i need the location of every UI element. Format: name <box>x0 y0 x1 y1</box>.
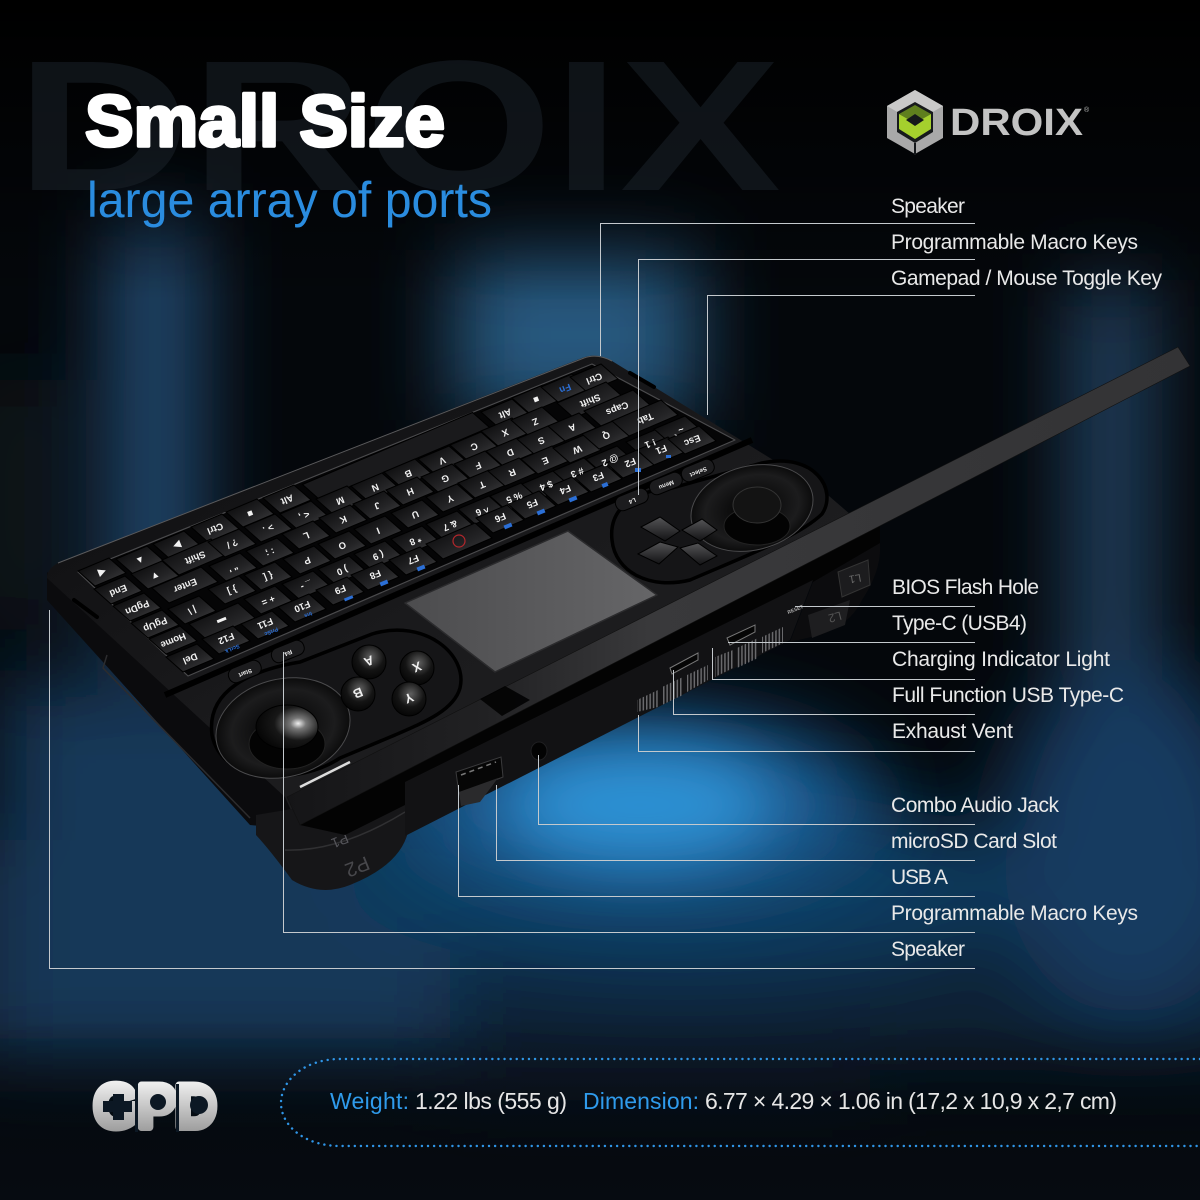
keyboard: # 3 <box>569 464 585 480</box>
keyboard: Fn <box>557 381 572 395</box>
left grip with P1 and P2 triggers: P1 <box>329 830 351 852</box>
specs pill dotted outline <box>281 1059 1200 1146</box>
lid edge <box>287 347 1190 825</box>
callout labels: microSD Card Slot <box>891 830 1057 853</box>
callout leader lines <box>50 224 975 968</box>
keyboard: P <box>301 554 312 567</box>
speaker slit, left <box>74 600 97 617</box>
callout labels <box>891 195 1162 961</box>
keyboard: < , <box>297 508 311 522</box>
right grip with L1 and L2 triggers <box>790 543 880 642</box>
left grip with P1 and P2 triggers <box>256 790 408 890</box>
keyboard: ? / <box>224 536 239 550</box>
keyboard: F12 <box>216 630 236 646</box>
keyboard: ▼ <box>149 568 161 582</box>
keyboard: ■ <box>245 507 255 519</box>
keyboard: } ] <box>226 583 238 597</box>
keyboard: | \ <box>186 603 198 617</box>
keyboard: Alt <box>496 406 513 421</box>
keyboard: F2 <box>623 455 637 469</box>
subtitle: large array of ports <box>87 172 492 228</box>
keyboard: F3 <box>591 469 605 483</box>
callout labels: Charging Indicator Light <box>892 648 1110 671</box>
keyboard: ) 0 <box>335 563 349 577</box>
keyboard: F10 <box>292 598 312 614</box>
callout labels: Speaker <box>891 195 965 218</box>
port panel with vents and connectors: RESET <box>787 604 804 616</box>
function buttons: L4 <box>627 496 636 504</box>
keyboard: O <box>337 539 347 551</box>
keyboard: M <box>334 493 346 507</box>
function buttons: R4 <box>283 648 293 656</box>
keyboard: E <box>540 454 550 466</box>
touchpad <box>405 531 657 672</box>
keyboard: I <box>375 524 381 536</box>
glossy highlight on lid edge <box>300 686 530 787</box>
DROIX logo: ® <box>1084 106 1090 114</box>
left grip with P1 and P2 triggers: P2 <box>342 851 372 881</box>
keyboard: X <box>499 426 510 439</box>
keyboard: ! 1 <box>642 436 657 450</box>
keyboard: G <box>440 472 450 484</box>
keyboard: F11 <box>255 615 274 631</box>
keyboard: & 7 <box>441 517 459 533</box>
keyboard: Enter <box>171 575 198 595</box>
hinge groove <box>165 440 752 695</box>
right grip with L1 and L2 triggers: L1 <box>848 571 862 585</box>
function buttons: Select <box>689 465 707 477</box>
keyboard: A <box>567 421 577 433</box>
keyboard: B <box>403 467 413 479</box>
callout labels: USB A <box>891 866 948 889</box>
callout labels: Speaker <box>891 938 965 961</box>
left gamepad controls: X <box>410 658 424 676</box>
keyboard: _ - <box>299 577 314 592</box>
callout labels: Programmable Macro Keys <box>891 231 1138 254</box>
keyboard: ▶ <box>170 538 183 552</box>
keyboard: > . <box>261 521 275 535</box>
port panel with vents and connectors <box>405 580 813 836</box>
keyboard: F7 <box>406 552 420 566</box>
device left side wall <box>47 572 300 830</box>
callout labels: Combo Audio Jack <box>891 794 1060 817</box>
keyboard: R <box>507 466 517 478</box>
callout labels: Full Function USB Type-C <box>892 684 1124 707</box>
DROIX logo: DROIX <box>950 102 1084 144</box>
keyboard: D <box>505 446 515 458</box>
specs text: 1.22 lbs (555 g) <box>415 1088 567 1114</box>
keyboard: F1 <box>653 442 668 456</box>
keyboard: Del <box>181 650 199 666</box>
keyboard: C <box>469 440 479 452</box>
keyboard: Y <box>444 492 455 505</box>
keyboard: K <box>338 513 348 525</box>
specs text: Dimension: <box>583 1088 699 1114</box>
keyboard: @ 2 <box>600 452 620 468</box>
keyboard: S <box>536 434 546 446</box>
function buttons: Menu <box>657 478 674 490</box>
keyboard: ▬ <box>215 614 228 628</box>
function buttons: Start <box>238 667 252 677</box>
keyboard: PrtSc <box>263 626 279 636</box>
front black band <box>300 525 880 835</box>
keyboard: ScrLk <box>223 642 240 654</box>
keyboard: F9 <box>333 582 347 596</box>
GPD logo: GPD <box>94 1073 216 1140</box>
keyboard: L <box>301 529 311 541</box>
keyboard: Shift <box>577 391 602 409</box>
keyboard: % 5 <box>504 489 524 505</box>
keyboard: Ins <box>303 610 313 618</box>
callout labels: Exhaust Vent <box>892 720 1013 743</box>
specs text <box>330 1088 1117 1114</box>
left gamepad controls <box>205 630 461 792</box>
keyboard: H <box>405 485 415 497</box>
keyboard: F <box>473 459 483 471</box>
keyboard: * 8 <box>408 533 422 547</box>
keyboard: Caps <box>604 399 630 417</box>
keyboard: F5 <box>524 496 539 510</box>
keyboard: V <box>436 454 447 467</box>
keyboard: ■ <box>531 393 541 405</box>
keyboard: J <box>372 499 382 511</box>
keyboard: Alt <box>278 492 295 507</box>
keyboard <box>78 364 735 676</box>
DROIX logo <box>887 90 1090 155</box>
left gamepad controls: Y <box>402 689 416 707</box>
speaker slit, top <box>630 373 654 387</box>
keyboard: ◀ <box>96 565 108 579</box>
keyboard: ~ ` <box>671 423 685 437</box>
keyboard: ▲ <box>134 553 146 567</box>
keyboard: ^ 6 <box>474 502 490 518</box>
keyboard: End <box>107 582 128 599</box>
keyboard: : ; <box>264 545 276 559</box>
keyboard: F8 <box>368 567 382 581</box>
keyboard: ( 9 <box>371 548 385 562</box>
callout labels: Programmable Macro Keys <box>891 902 1138 925</box>
keyboard: + = <box>259 592 276 608</box>
top face of the device <box>47 356 880 830</box>
specs text: 6.77 × 4.29 × 1.06 in (17,2 x 10,9 x 2,7 cm) <box>705 1088 1117 1114</box>
left gamepad controls: A <box>361 652 376 670</box>
keyboard: Ctrl <box>584 370 604 386</box>
keyboard: W <box>571 442 583 456</box>
device: GPD handheld <box>47 347 1190 890</box>
keyboard: Shift <box>182 548 207 566</box>
title: Small Size <box>85 82 445 162</box>
keyboard: PgUp <box>141 614 169 634</box>
keyboard: Ctrl <box>205 520 225 536</box>
watermark logo text: DROIX <box>16 23 781 230</box>
keyboard: $ 4 <box>537 477 554 493</box>
callout labels: BIOS Flash Hole <box>892 576 1039 599</box>
keyboard: F6 <box>493 510 507 524</box>
right grip with L1 and L2 triggers: L2 <box>826 609 843 626</box>
left gamepad controls: B <box>351 684 365 702</box>
specs text: Weight: <box>330 1088 409 1114</box>
keyboard: Q <box>601 429 611 441</box>
keyboard: Z <box>530 415 540 427</box>
keyboard: " ' <box>227 560 239 574</box>
keyboard: N <box>370 481 380 493</box>
function buttons <box>226 457 716 685</box>
callout labels: Gamepad / Mouse Toggle Key <box>891 267 1162 290</box>
keyboard: PgDn <box>123 597 151 617</box>
keyboard: Tab <box>635 410 655 426</box>
keyboard: T <box>477 478 487 490</box>
right gamepad controls <box>612 452 827 583</box>
keyboard: { [ <box>261 569 274 583</box>
keyboard: Esc <box>682 432 702 448</box>
keyboard: Home <box>159 630 187 650</box>
keyboard: U <box>410 508 420 520</box>
keyboard: F4 <box>557 482 572 496</box>
callout labels: Type-C (USB4) <box>892 612 1027 635</box>
